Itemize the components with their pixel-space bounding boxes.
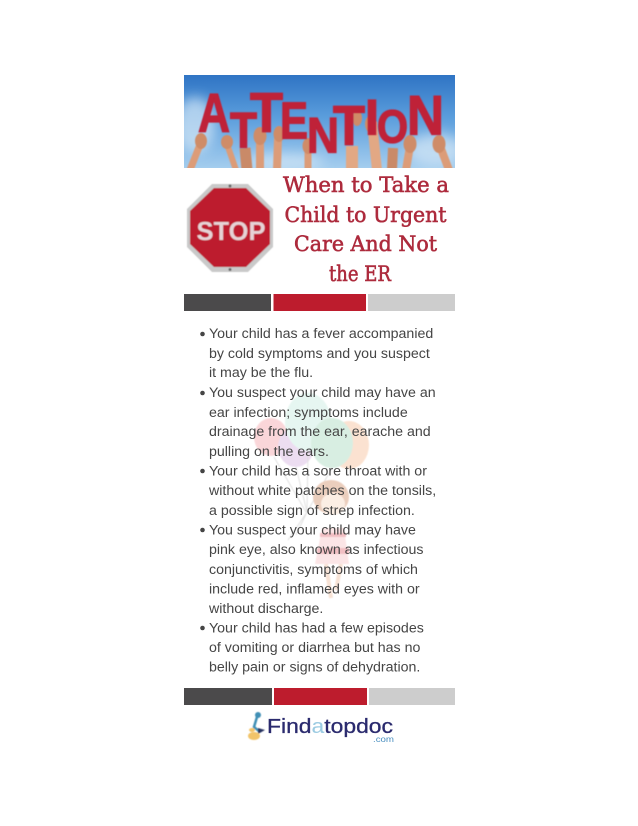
bullet 2: drainage from the ear, earache and (209, 424, 431, 440)
bullet 5: belly pain or signs of dehydration. (209, 660, 420, 676)
bullet 1 (200, 326, 433, 381)
top colour bars (184, 294, 455, 311)
bullet 2: ear infection; symptoms include (209, 405, 408, 421)
bullet 4: You suspect your child may have (209, 522, 416, 538)
bullet 3 (200, 464, 436, 519)
red attention letters: I (365, 90, 379, 146)
bullet 5: Your child has had a few episodes (209, 620, 424, 636)
banner: attention photo (175, 75, 463, 170)
logo wordmark: Find atopdoc (267, 716, 393, 738)
red attention letters (198, 92, 442, 154)
red attention letters: N (307, 108, 339, 164)
watermark: balloons and girl (254, 393, 369, 598)
bullet 4: conjunctivitis, symptoms of which (209, 562, 418, 578)
logo suffix: .com (373, 735, 394, 744)
bullet 3: without white patches on the tonsils, (208, 483, 436, 499)
girl (313, 480, 349, 598)
bullet 4 (200, 522, 424, 617)
red attention letters: E (280, 92, 308, 150)
clouds (175, 97, 463, 170)
title: When to Take a (283, 173, 449, 197)
sign border (187, 184, 273, 272)
title: Care And Not (294, 232, 438, 256)
bullet 2: pulling on the ears. (209, 444, 329, 460)
title: Child to Urgent (284, 203, 447, 227)
bullet 2 (200, 385, 436, 460)
sign face (190, 188, 270, 267)
red attention letters: O (377, 100, 408, 152)
red attention letters: T (230, 102, 257, 158)
logo: findatopdoc (248, 712, 394, 744)
bottom colour bars (184, 688, 455, 705)
bullet list (200, 326, 436, 676)
bullet 1: it may be the flu. (209, 365, 313, 381)
bullet 1: Your child has a fever accompanied (209, 326, 433, 342)
balloon strings (274, 451, 332, 540)
red attention letters: N (407, 84, 444, 146)
red attention letters: A (198, 82, 230, 144)
bullet 5 (200, 620, 424, 676)
sign bolts (228, 184, 232, 271)
icon: stork (248, 712, 265, 740)
balloons (254, 393, 369, 469)
bullet 4: without discharge. (208, 601, 323, 617)
bullet 2: You suspect your child may have an (209, 385, 436, 401)
bullet 1: by cold symptoms and you suspect (209, 346, 430, 362)
title (283, 173, 449, 286)
bullet 4: include red, inflamed eyes with or (209, 582, 420, 598)
infographic (184, 75, 455, 742)
red attention letters: T (250, 80, 283, 144)
bullet 3: a possible sign of strep infection. (209, 503, 415, 519)
sky background (184, 75, 455, 168)
icon: stop sign (187, 184, 273, 272)
bullet 3: Your child has a sore throat with or (209, 464, 427, 480)
raised arms and hands (190, 110, 449, 170)
bullet 5: of vomiting or diarrhea but has no (209, 640, 420, 656)
sign text: STOP (196, 216, 266, 246)
red attention letters: T (333, 94, 365, 156)
bullet 4: pink eye, also known as infectious (209, 542, 424, 558)
title: the ER (329, 262, 392, 286)
